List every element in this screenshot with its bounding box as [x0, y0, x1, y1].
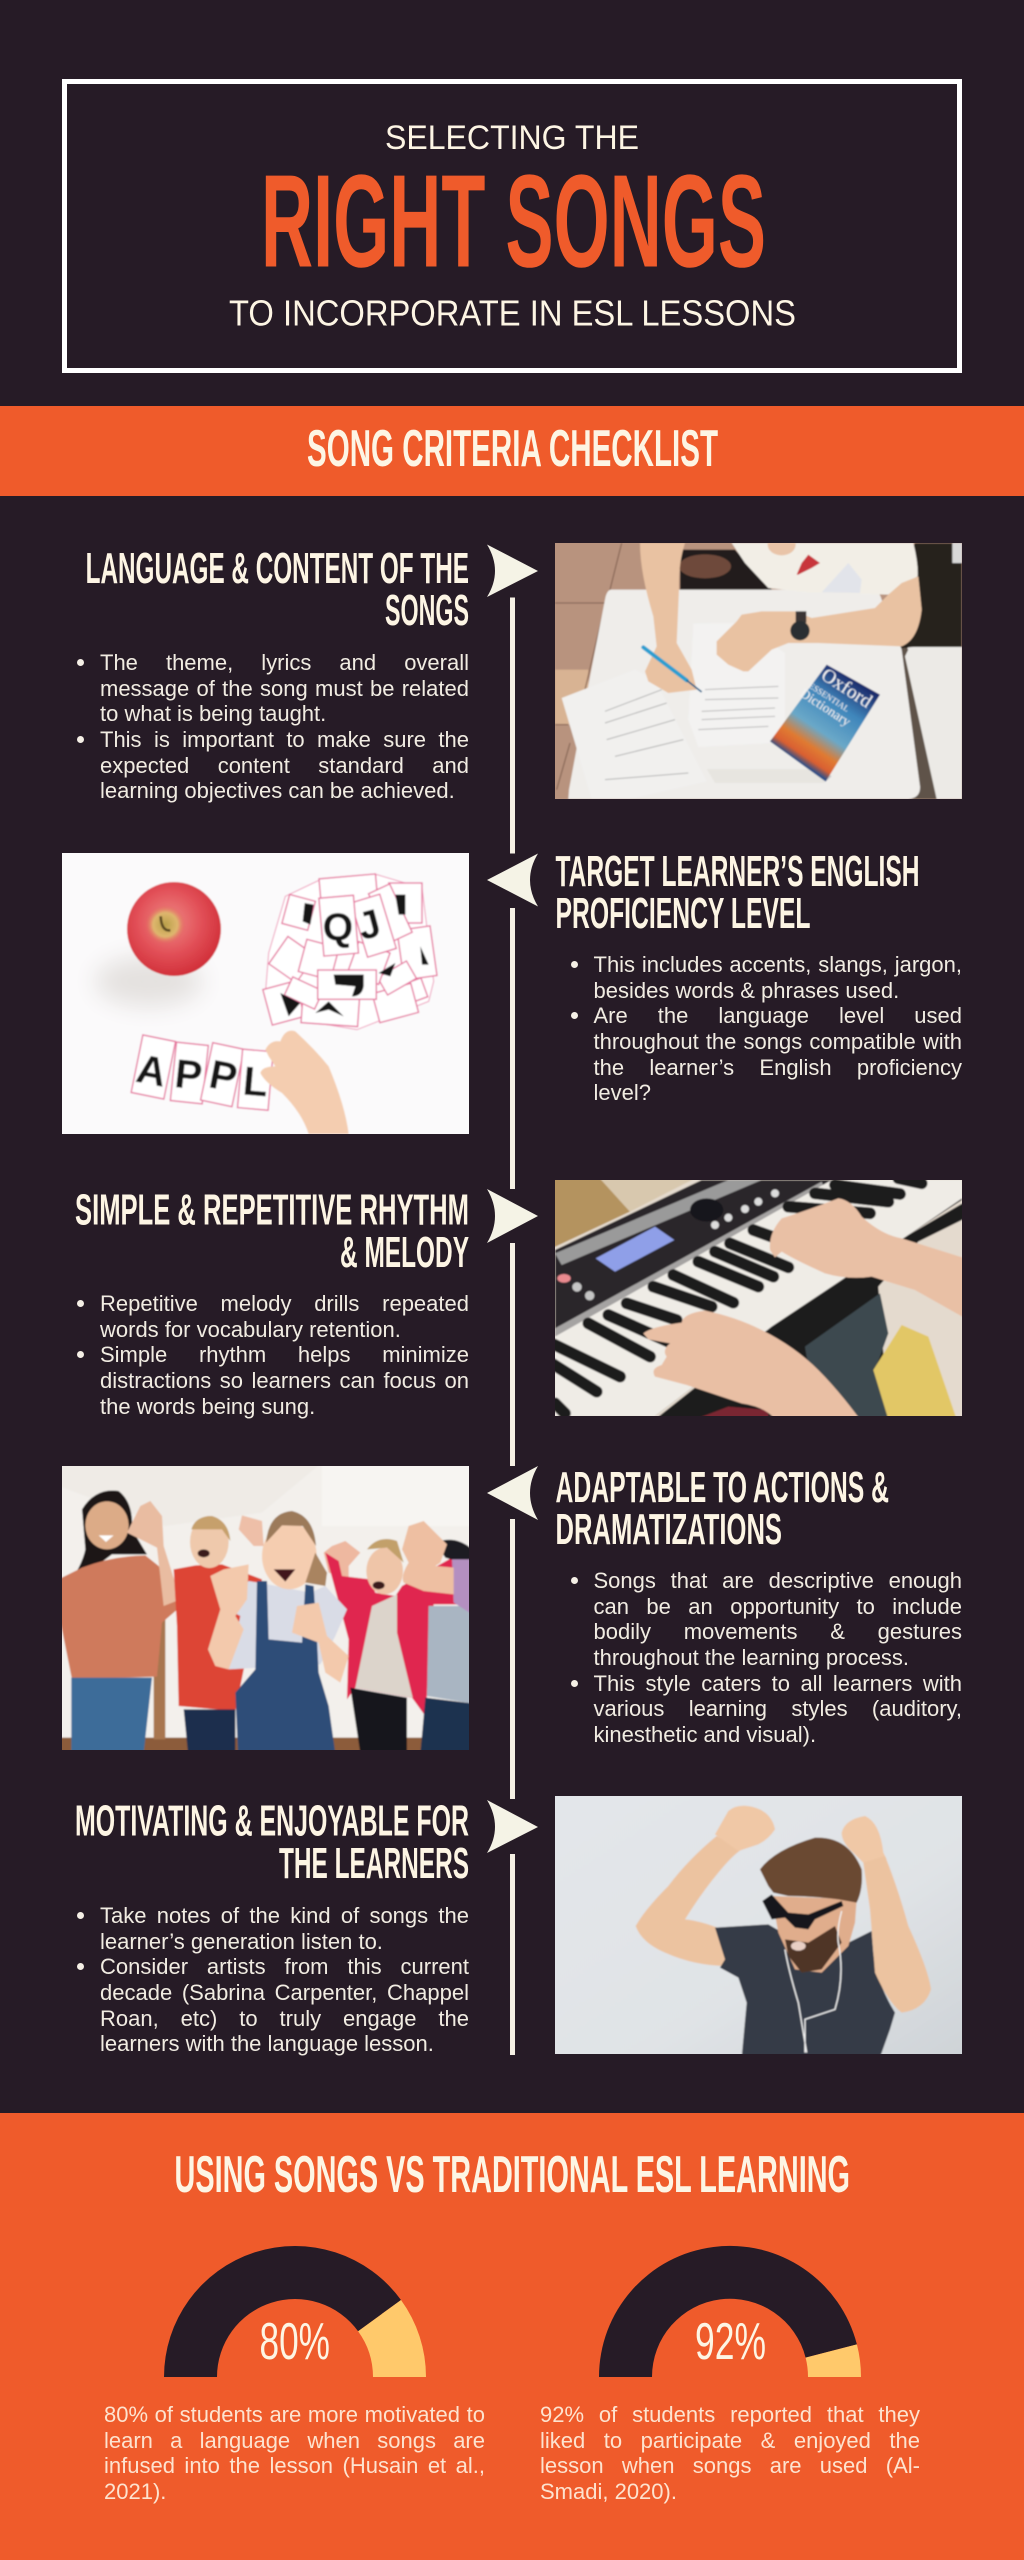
- bullet text: Consider artists from this current: [100, 1954, 469, 1979]
- stat text: 92%: 92% of students reported that they: [540, 2402, 920, 2427]
- bullet text: learners with the language lesson.: [100, 2031, 434, 2056]
- bullet text: level?: [594, 1080, 651, 1105]
- heading: [86, 545, 469, 633]
- bullet text: expected content standard and: [100, 753, 469, 778]
- gauge: 92%: [599, 2246, 861, 2377]
- photo: apple and alphabet cards: Q: [323, 905, 353, 949]
- banner heading: SONG CRITERIA CHECKLIST: [307, 420, 718, 478]
- photo: student writing at a desk with dictionary: Dictionary: [797, 685, 854, 729]
- bullet text: Repetitive melody drills repeated: [100, 1291, 469, 1316]
- bullet text: [77, 1903, 469, 2056]
- arrow 1: [487, 544, 538, 597]
- banner: song criteria checklist: [0, 406, 1024, 496]
- panel: simple and repetitive rhythm: [75, 1180, 962, 1419]
- timeline: arrows and connecting lines: [487, 544, 538, 2055]
- panel: using songs vs traditional ESL learning: [0, 2113, 1024, 2560]
- bullet text: Songs that are descriptive enough: [594, 1568, 962, 1593]
- stat text: 80%: 80% of students are more motivated to: [104, 2402, 485, 2427]
- bullet text: to what is being taught.: [100, 701, 326, 726]
- panel: motivating and enjoyable: [75, 1796, 962, 2056]
- stat text: 92%: [540, 2402, 920, 2504]
- bullet text: Simple rhythm helps minimize: [100, 1342, 469, 1367]
- heading: [556, 853, 920, 938]
- panel: language and content: [77, 543, 962, 803]
- heading: DRAMATIZATIONS: [556, 1506, 782, 1554]
- heading: [75, 1186, 469, 1275]
- bullet text: [571, 952, 962, 1105]
- photo: hands on a keyboard: [555, 1180, 962, 1416]
- title text: [229, 119, 796, 334]
- heading: [75, 1798, 469, 1886]
- arrow 3: [487, 1189, 538, 1243]
- stat text: 92%: lesson when songs are used (Al-: [540, 2453, 920, 2478]
- bullet text: distractions so learners can focus on: [100, 1368, 469, 1393]
- gauge: 80%: [164, 2246, 426, 2377]
- heading: [556, 1466, 889, 1554]
- bullet text: learner’s generation listen to.: [100, 1929, 383, 1954]
- photo: student writing at a desk with dictionary: ESSENTIAL: [807, 680, 851, 714]
- photo: student writing at a desk with dictionary: Oxford: [817, 665, 876, 713]
- bullet text: [77, 650, 469, 803]
- photo: apple and alphabet cards: L: [241, 1057, 270, 1105]
- bullet text: besides words & phrases used.: [594, 978, 899, 1003]
- panel: target learner's proficiency: [62, 853, 962, 1134]
- bullet text: can be an opportunity to include: [594, 1594, 962, 1619]
- bullet text: decade (Sabrina Carpenter, Chappel: [100, 1980, 469, 2005]
- bullet text: Take notes of the kind of songs the: [100, 1903, 469, 1928]
- photo: apple and alphabet cards: P: [173, 1050, 205, 1099]
- bullet text: This includes accents, slangs, jargon,: [594, 952, 962, 977]
- stat text: 80%: infused into the lesson (Husain et al.,: [104, 2453, 485, 2478]
- photo: children dancing and acting: [62, 1466, 469, 1750]
- gauge: 92%: 92%: [695, 2313, 766, 2371]
- gauge: 80%: 80%: [260, 2313, 330, 2371]
- title frame: [62, 79, 962, 373]
- photo: apple and alphabet cards: [62, 853, 469, 1134]
- bullet text: the learner’s English proficiency: [594, 1055, 962, 1080]
- panel: adaptable to actions: [62, 1466, 962, 1750]
- bullet text: throughout the learning process.: [594, 1645, 909, 1670]
- title text: TO INCORPORATE IN ESL LESSONS: [229, 292, 796, 334]
- bullet text: words for vocabulary retention.: [100, 1317, 401, 1342]
- photo: apple and alphabet cards: J: [353, 901, 385, 949]
- bullet text: This is important to make sure the: [100, 727, 469, 752]
- bullet text: Roan, etc) to truly engage the: [100, 2006, 469, 2031]
- bullet text: [571, 1568, 962, 1747]
- bullet text: [77, 1291, 469, 1419]
- bullet text: This style caters to all learners with: [594, 1671, 962, 1696]
- photo: apple and alphabet cards: P: [206, 1051, 241, 1101]
- bullet text: throughout the songs compatible with: [594, 1029, 962, 1054]
- bullet text: message of the song must be related: [100, 676, 469, 701]
- arrow 2: [487, 854, 538, 906]
- bullet text: various learning styles (auditory,: [594, 1696, 962, 1721]
- arrow 5: [487, 1800, 538, 1853]
- photo: student writing at a desk with dictionary: [555, 543, 962, 799]
- stat text: 80%: [104, 2402, 485, 2504]
- photo: apple and alphabet cards: A: [133, 1045, 171, 1096]
- arrow 4: [487, 1466, 538, 1520]
- stat text: 92%: Smadi, 2020).: [540, 2479, 677, 2504]
- bullet text: kinesthetic and visual).: [594, 1722, 816, 1747]
- bullet text: Are the language level used: [594, 1003, 962, 1028]
- title text: SELECTING THE: [385, 119, 639, 157]
- bullet text: bodily movements & gestures: [594, 1619, 962, 1644]
- bullet text: the words being sung.: [100, 1394, 315, 1419]
- photo: man dancing with earphones: [555, 1796, 962, 2054]
- stat text: 80%: learn a language when songs are: [104, 2428, 485, 2453]
- stat text: 92%: liked to participate & enjoyed the: [540, 2428, 920, 2453]
- bullet text: learning objectives can be achieved.: [100, 778, 455, 803]
- bullet text: The theme, lyrics and overall: [100, 650, 469, 675]
- stat text: 80%: 2021).: [104, 2479, 166, 2504]
